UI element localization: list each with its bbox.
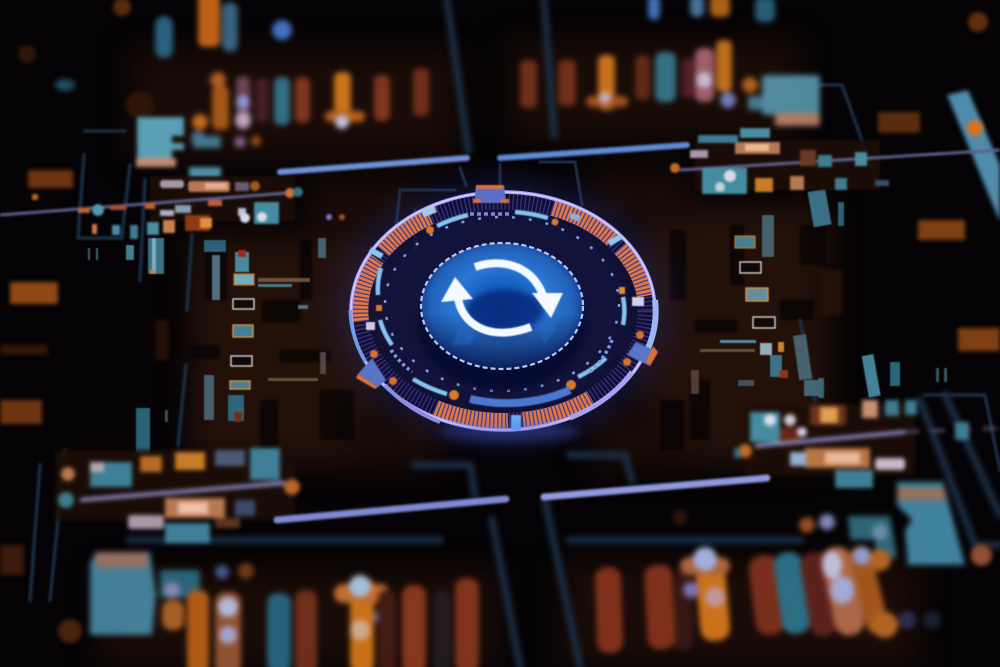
- tick gaps: [360, 201, 646, 421]
- glowing light bars: [277, 145, 767, 520]
- brown circuit substrate: [100, 40, 920, 667]
- right column small chips: [691, 189, 947, 398]
- upper-left circuit cluster: [0, 176, 345, 239]
- ring glow halo: [308, 156, 698, 466]
- inner blue segmented ring: [378, 212, 624, 403]
- left column small chips: [88, 238, 326, 454]
- lower-right bokeh bars: [595, 482, 991, 653]
- upper-right circuit cluster: [670, 128, 1000, 194]
- disc lower shading: [421, 243, 583, 369]
- dark ring interior: [353, 194, 653, 428]
- orange tick segments: [360, 208, 645, 421]
- lower-right circuit cluster: [734, 400, 1000, 488]
- right edge diagonal strip: [947, 90, 1000, 222]
- cylinder shadow under disc: [418, 262, 586, 390]
- refresh hologram ring: [350, 185, 658, 430]
- disc dashed edge: [421, 243, 583, 369]
- lower-left circuit cluster: [55, 448, 300, 543]
- small dashed inner ring: [385, 217, 619, 391]
- blue central disc: [421, 243, 583, 369]
- icon reflection: [452, 320, 560, 345]
- teal block upper left: [136, 117, 221, 181]
- bottom glow under ring: [440, 422, 580, 442]
- segment dividers: [366, 205, 644, 430]
- top-left bokeh bars: [55, 0, 429, 148]
- lower-left bokeh bars: [90, 552, 479, 667]
- icon: refresh arrows: [441, 263, 563, 333]
- dark swirl in disc centre: [467, 290, 543, 330]
- outer lavender ring: [350, 192, 656, 430]
- top-right bokeh bars: [520, 0, 820, 126]
- small tick boxes: [356, 185, 658, 389]
